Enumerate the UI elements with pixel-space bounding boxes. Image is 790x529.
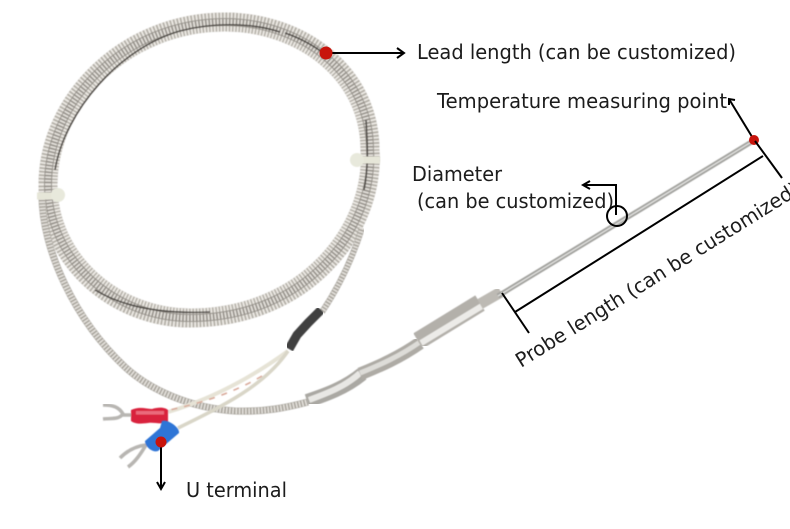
marker: temperature measuring point	[729, 99, 759, 145]
label: temperature measuring point: Temperature measuring point	[436, 89, 727, 113]
red U terminal	[103, 405, 168, 424]
marker: lead length	[320, 46, 404, 60]
marker: U terminal	[156, 436, 166, 489]
metal fitting	[418, 292, 501, 343]
label: lead length: Lead length (can be customized)	[417, 40, 736, 64]
probe sleeve and bend	[307, 342, 420, 401]
dimension line: probe length	[502, 141, 782, 333]
thin insulated wires	[168, 351, 288, 428]
lead strand to heat shrink	[322, 228, 362, 312]
marker: diameter	[583, 181, 627, 226]
heat shrink tube	[289, 310, 321, 349]
cable clips	[37, 153, 380, 202]
label: U terminal: U terminal	[186, 478, 287, 502]
coiled braided lead	[48, 22, 370, 318]
blue U terminal	[120, 421, 179, 467]
lead to probe sleeve	[42, 195, 308, 411]
label: diameter: Diameter	[412, 162, 503, 186]
label: diameter: (can be customized)	[417, 189, 614, 213]
probe shaft	[498, 141, 753, 296]
label: diameter	[412, 162, 614, 213]
